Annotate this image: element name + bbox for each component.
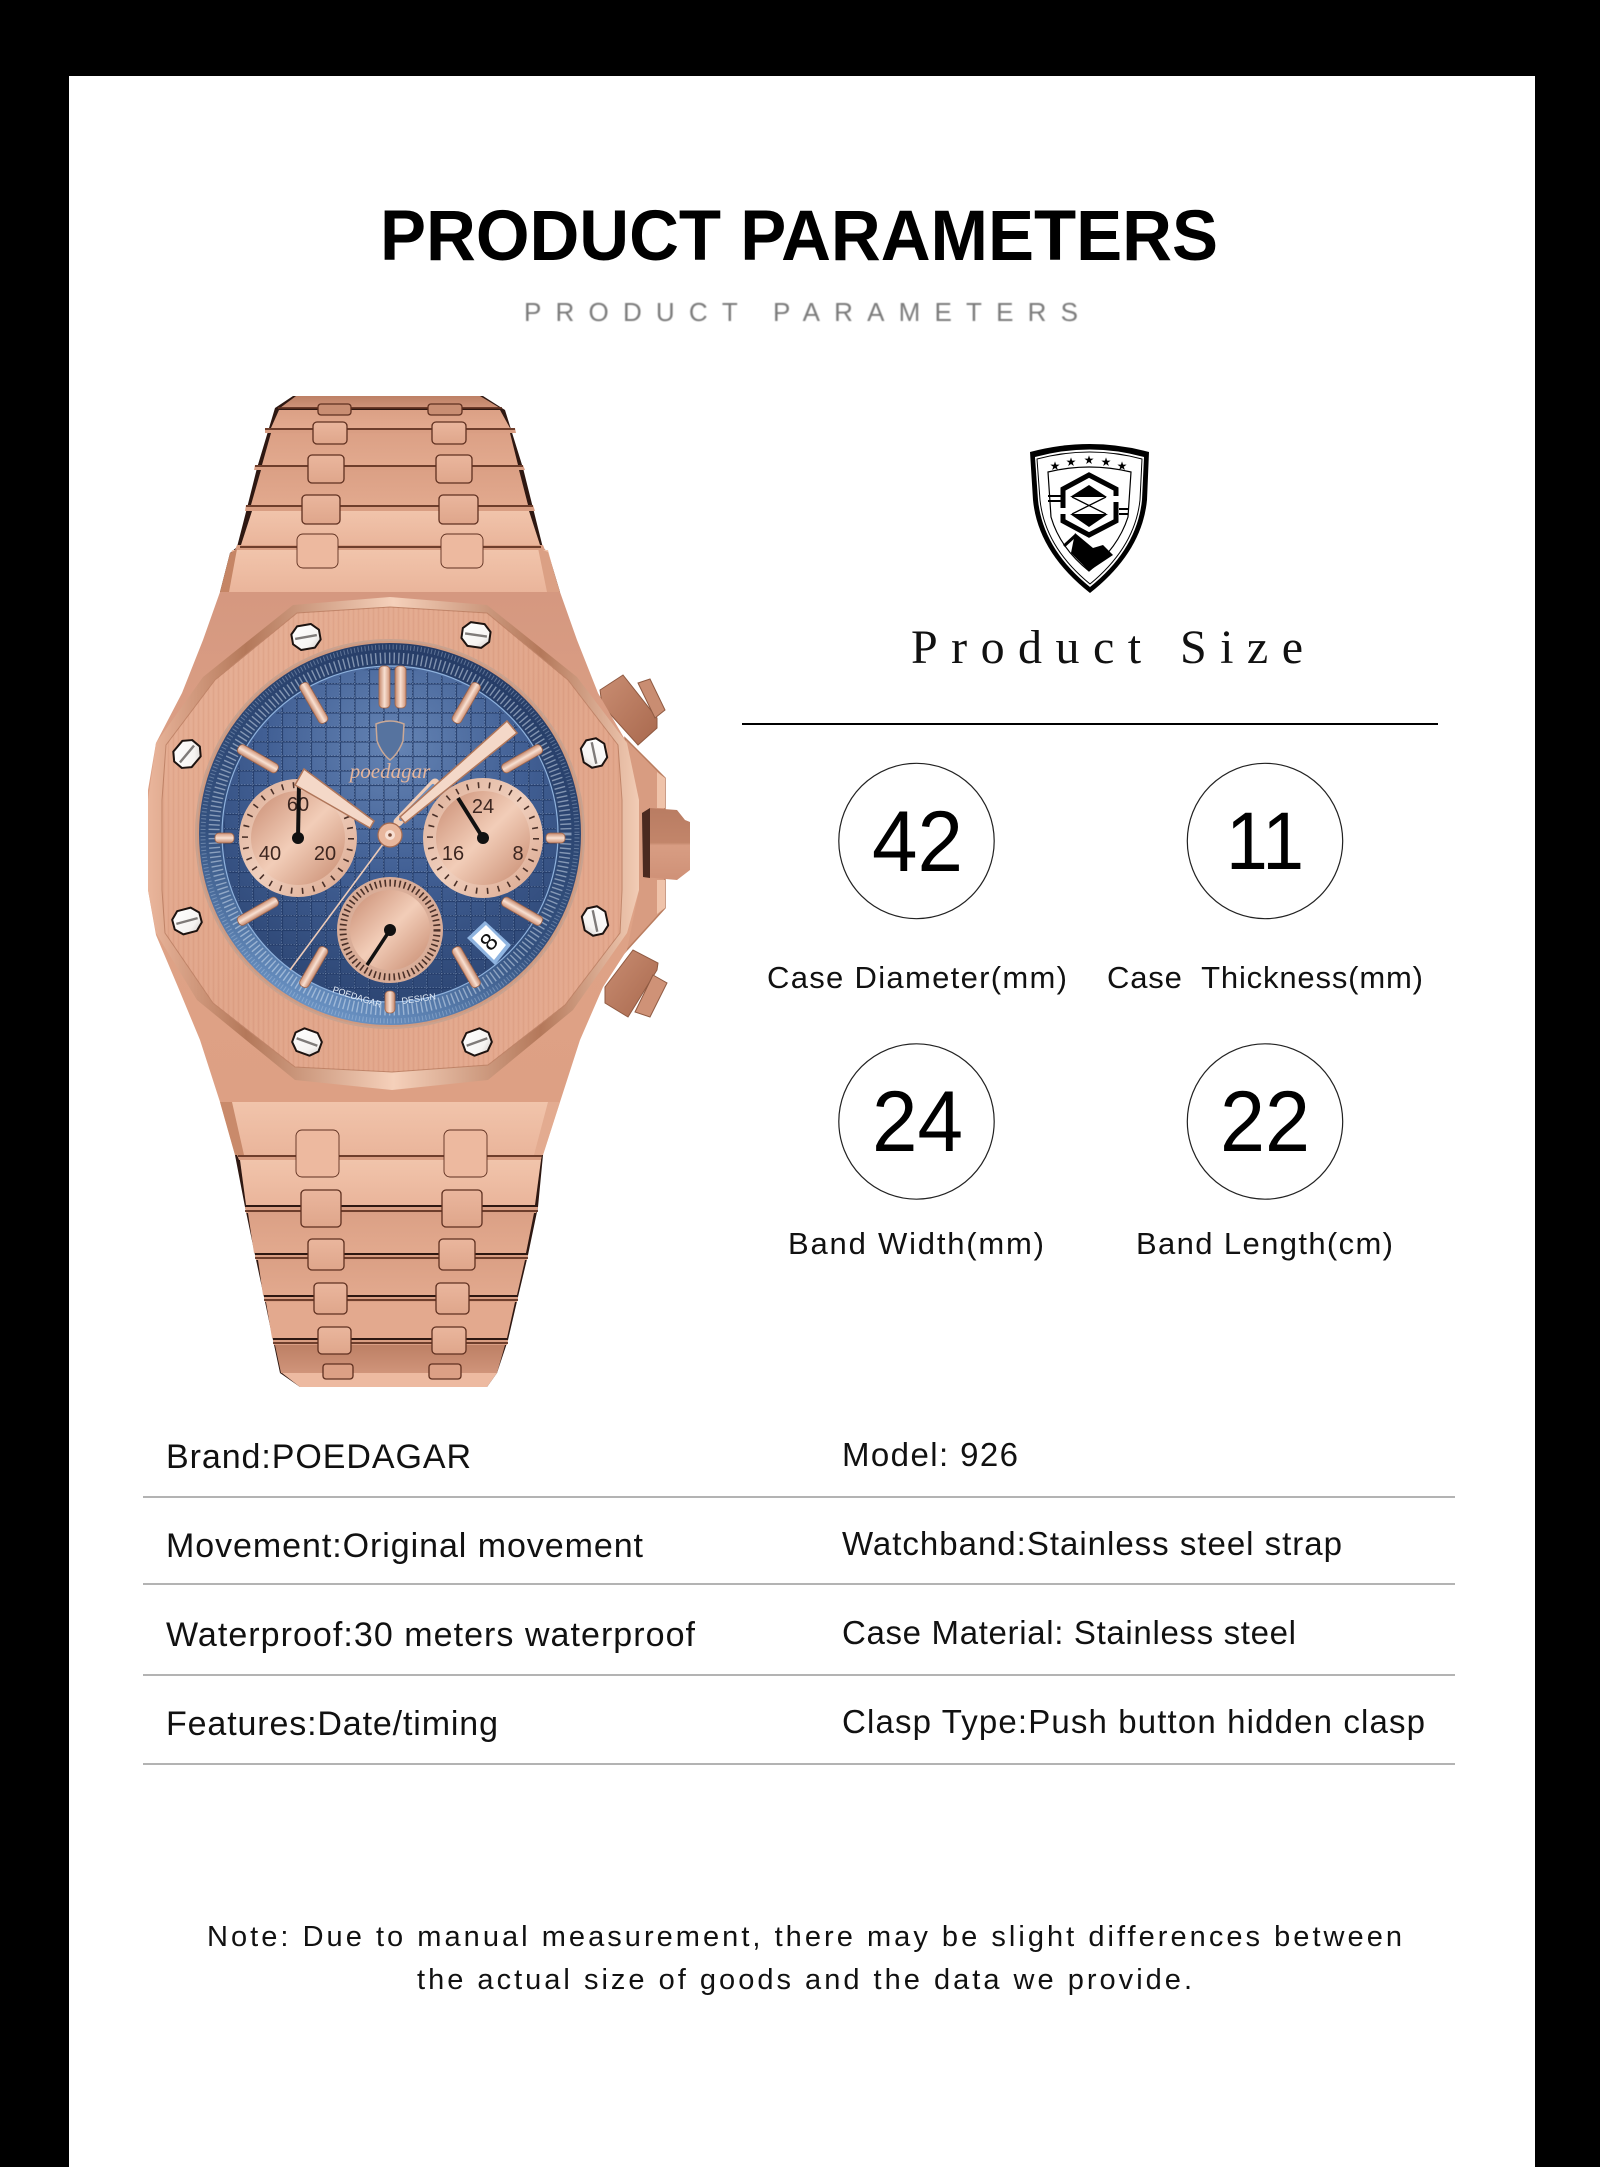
crown guard, crown and pushers: [600, 675, 690, 1017]
measurement note: the actual size of goods and the data we provide.: [417, 1964, 1192, 1996]
right subdial: 24: [472, 796, 494, 818]
logo stars: ★: [1101, 455, 1111, 469]
logo stars: [1050, 453, 1127, 473]
stat: band length: 22: [1220, 1074, 1310, 1170]
stat: case thickness: [1107, 763, 1423, 995]
stat: case thickness: 11: [1226, 796, 1304, 887]
bracelet lips: [235, 428, 545, 550]
stat: case diameter: [767, 763, 1067, 995]
second hand counterweight: [398, 783, 435, 822]
right spec column: Case Material: Stainless steel: [842, 1614, 1296, 1651]
specification table: [143, 1436, 1455, 1765]
subtitle: PRODUCT PARAMETERS: [524, 297, 1078, 327]
centre hub: [378, 823, 402, 847]
brand shield logo: [1030, 444, 1149, 593]
right spec column: [842, 1436, 1425, 1740]
left spec column: Waterproof:30 meters waterproof: [166, 1616, 696, 1654]
upper bracelet: [220, 396, 560, 592]
dial brand mark: [348, 721, 431, 783]
right subdial: 16: [442, 843, 464, 865]
stat: band width: [788, 1044, 1044, 1261]
flange text: POEDAGAR: [331, 984, 383, 1010]
watch dial: [196, 640, 584, 1028]
stat: case diameter: Case Diameter(mm): [767, 960, 1067, 995]
lower bracelet lips: [237, 1155, 542, 1345]
logo stars: ★: [1084, 453, 1094, 467]
lower links: [296, 1130, 487, 1379]
bottom subdial: [337, 877, 443, 983]
flange text: DESIGN: [401, 991, 436, 1006]
case: [148, 592, 639, 1102]
logo stars: ★: [1117, 459, 1127, 473]
stat: band width: 24: [872, 1074, 963, 1170]
left subdial: [239, 779, 357, 897]
left spec column: Movement:Original movement: [166, 1527, 644, 1565]
right spec column: Clasp Type:Push button hidden clasp: [842, 1703, 1425, 1740]
date window: 8: [475, 928, 504, 956]
upper links: [297, 404, 483, 568]
measurement note: Note: Due to manual measurement, there may be slight differences between: [207, 1921, 1402, 1953]
stat: band length: Band Length(cm): [1136, 1226, 1393, 1261]
left subdial: 60: [287, 794, 309, 816]
flange text: [331, 984, 436, 1010]
left spec column: [166, 1438, 696, 1743]
left spec column: Features:Date/timing: [166, 1705, 498, 1743]
right subdial: [423, 778, 543, 898]
product size heading: Product Size: [911, 621, 1303, 674]
left spec column: Brand:POEDAGAR: [166, 1438, 471, 1476]
bezel screws: [169, 621, 610, 1058]
date window: [467, 921, 511, 965]
measurement note: [207, 1921, 1402, 1996]
logo stars: ★: [1050, 459, 1060, 473]
divider: [742, 723, 1438, 725]
lower bracelet: [220, 1102, 560, 1387]
right spec column: Model: 926: [842, 1436, 1018, 1473]
right spec column: Watchband:Stainless steel strap: [842, 1525, 1342, 1562]
right subdial: 8: [512, 843, 524, 865]
stat: band width: Band Width(mm): [788, 1226, 1044, 1261]
watch illustration: [148, 396, 690, 1387]
stat: band length: [1136, 1044, 1393, 1261]
hour hand: [295, 769, 374, 828]
stat: case diameter: 42: [872, 794, 963, 890]
minute hand: [400, 721, 517, 823]
title: PRODUCT PARAMETERS: [380, 197, 1218, 276]
stat: case thickness: Case Thickness(mm): [1107, 960, 1423, 995]
left subdial: 20: [314, 843, 336, 865]
table rules: [143, 1496, 1455, 1765]
logo emblem: [1048, 475, 1128, 571]
dial brand mark: poedagar: [348, 759, 431, 783]
logo stars: ★: [1066, 455, 1076, 469]
second hand: [290, 832, 392, 970]
hour markers: [215, 666, 565, 1013]
bezel: [148, 597, 639, 1090]
left subdial: 40: [259, 843, 281, 865]
